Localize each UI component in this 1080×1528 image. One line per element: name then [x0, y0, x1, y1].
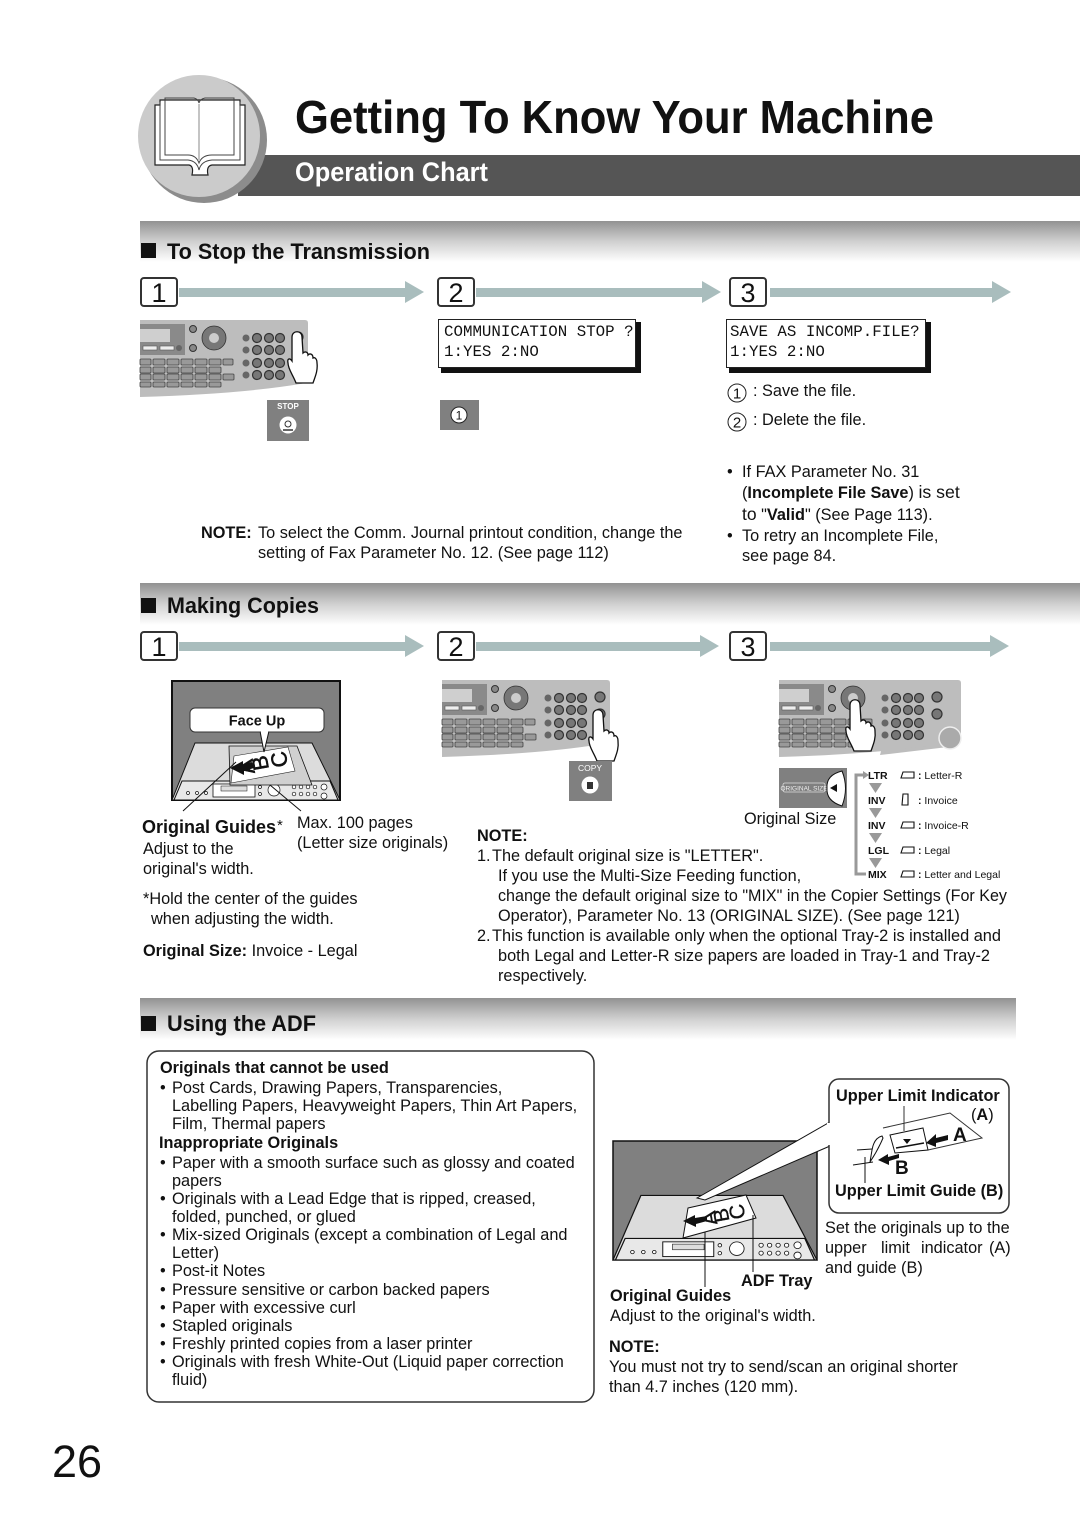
original guides label: Adjust to the original's width. — [610, 1307, 816, 1325]
original size key: ORIGINAL SIZE — [780, 786, 828, 792]
display: save as incomplete file: 1:YES 2:NO — [730, 343, 825, 361]
original guides text: original's width. — [143, 860, 254, 878]
face up label — [190, 708, 324, 752]
copy note: The default original size is "LETTER". — [492, 847, 763, 865]
control panel with hand on stop — [140, 320, 317, 397]
control panel with hand on original size — [779, 680, 961, 757]
panel: originals that cannot be used: Originals with a Lead Edge that is ripped, creased, — [172, 1190, 536, 1208]
paper size cycle list: : Letter-R — [918, 770, 963, 782]
fax parameter bullets: (Incomplete File Save) is set — [742, 482, 960, 502]
panel: originals that cannot be used — [147, 1051, 594, 1402]
panel: originals that cannot be used: Letter) — [172, 1244, 219, 1262]
original guides text: Original Guides — [142, 817, 276, 837]
max pages text — [297, 814, 448, 852]
display: communication stop — [438, 320, 641, 373]
ADF note: than 4.7 inches (120 mm). — [609, 1378, 798, 1396]
header band — [238, 155, 1080, 196]
copy note: respectively. — [498, 967, 587, 985]
panel: originals that cannot be used: Post Cards, Drawing Papers, Transparencies, — [172, 1079, 502, 1097]
paper size cycle list: LGL — [868, 845, 890, 857]
paper size cycle list: : Legal — [918, 845, 950, 857]
panel: originals that cannot be used: papers — [172, 1172, 222, 1190]
option list: 1 — [733, 386, 741, 402]
square bullet — [141, 243, 156, 258]
max pages text: (Letter size originals) — [297, 834, 448, 852]
panel: originals that cannot be used: folded, punched, or glued — [172, 1208, 356, 1226]
panel: originals that cannot be used: • — [160, 1262, 166, 1280]
panel: originals that cannot be used: Paper with a smooth surface such as glossy and coated — [172, 1154, 575, 1172]
section band — [140, 583, 1080, 625]
panel: originals that cannot be used: fluid) — [172, 1371, 207, 1389]
heading: Making Copies — [167, 593, 319, 618]
fax parameter bullets: If FAX Parameter No. 31 — [742, 463, 919, 481]
ADF illustration — [613, 1122, 830, 1260]
original guides text: *Hold the center of the guides — [143, 890, 358, 908]
panel: originals that cannot be used: Freshly printed copies from a laser printer — [172, 1335, 473, 1353]
copy key icon — [569, 761, 612, 801]
display: communication stop: COMMUNICATION STOP ? — [444, 323, 634, 341]
panel: originals that cannot be used: Originals with fresh White-Out (Liquid paper correction — [172, 1353, 564, 1371]
fax parameter bullets: to "Valid" (See Page 113). — [742, 504, 933, 524]
callout wedge — [697, 1122, 830, 1200]
title: Getting To Know Your Machine — [295, 91, 934, 143]
page number: 26 — [52, 1436, 102, 1487]
panel: originals that cannot be used: • — [160, 1079, 166, 1097]
paper size cycle list: INV — [868, 795, 886, 807]
key 1 icon — [440, 400, 479, 430]
display: save as incomplete file: SAVE AS INCOMP.FILE? — [730, 323, 920, 341]
option list: 2 — [733, 414, 741, 432]
step 2 box — [438, 632, 474, 662]
original size key — [779, 768, 847, 808]
fax parameter bullets: To retry an Incomplete File, — [742, 527, 938, 545]
step 1 box: 1 — [151, 278, 167, 308]
leader lines — [183, 762, 301, 811]
panel: originals that cannot be used: • — [160, 1190, 166, 1208]
callout: upper limit detail: (A) — [971, 1106, 994, 1124]
copy note: Operator), Parameter No. 13 (ORIGINAL SIZE). (See page 121) — [498, 907, 960, 925]
step 3 box: 3 — [740, 278, 756, 308]
header book icon — [138, 75, 267, 203]
panel: originals that cannot be used: • — [160, 1281, 166, 1299]
square bullet — [141, 1016, 156, 1031]
copy note: 2. — [477, 927, 491, 945]
arrow 2 — [476, 281, 721, 303]
step 2 box: 2 — [448, 278, 464, 308]
control panel with hand on copy — [442, 680, 618, 761]
callout: upper limit detail: B — [895, 1158, 909, 1179]
panel: originals that cannot be used: Film, Thermal papers — [172, 1115, 326, 1133]
ADF note: NOTE: — [609, 1338, 660, 1356]
panel: originals that cannot be used: Pressure sensitive or carbon backed papers — [172, 1281, 490, 1299]
section: To Stop the Transmission — [140, 221, 1080, 264]
note: comm journal — [201, 524, 682, 562]
original guides label: Original Guides — [610, 1287, 731, 1305]
face up document illustration: ABC — [233, 749, 293, 776]
paper size cycle list: LTR — [868, 770, 888, 782]
callout: upper limit detail: Upper Limit Indicator — [836, 1087, 1000, 1105]
fax parameter bullets: • — [727, 527, 733, 545]
steps row 2 — [141, 632, 1009, 662]
panel: originals that cannot be used: • — [160, 1299, 166, 1317]
set originals text: limit — [881, 1239, 910, 1257]
note: comm journal: setting of Fax Parameter No. 12. (See page 112) — [258, 544, 609, 562]
fax parameter bullets: • — [727, 463, 733, 481]
arrow 2 — [476, 635, 719, 657]
option list: : Save the file. — [753, 382, 856, 400]
step 3 box — [730, 632, 766, 662]
panel: originals that cannot be used: Labelling Papers, Heavyweight Papers, Thin Art Papers, — [172, 1097, 577, 1115]
heading: To Stop the Transmission — [167, 239, 430, 264]
heading: Using the ADF — [167, 1011, 316, 1036]
arrow 3 — [770, 635, 1009, 657]
step 2 box — [438, 278, 474, 308]
note: comm journal: To select the Comm. Journal printout condition, change the — [258, 524, 682, 542]
callout: upper limit detail: A — [953, 1125, 967, 1146]
step 2 box: 2 — [448, 632, 464, 662]
copy note: both Legal and Letter-R size papers are loaded in Tray-1 and Tray-2 — [498, 947, 990, 965]
panel: originals that cannot be used: • — [160, 1353, 166, 1371]
option list: : Delete the file. — [753, 411, 866, 429]
arrow 3 — [770, 281, 1011, 303]
panel: originals that cannot be used: Post-it Notes — [172, 1262, 265, 1280]
paper size cycle list: : Invoice-R — [918, 820, 969, 832]
option list — [728, 382, 866, 432]
original guides text: when adjusting the width. — [150, 910, 334, 928]
paper size cycle list: : Letter and Legal — [918, 869, 1000, 881]
set originals text: upper — [825, 1239, 867, 1257]
display: communication stop: 1:YES 2:NO — [444, 343, 539, 361]
paper size cycle list — [856, 770, 1000, 881]
ADF note — [609, 1338, 958, 1396]
set originals text: (A) — [989, 1239, 1011, 1257]
steps row 1 — [141, 278, 1011, 308]
paper size cycle list: INV — [868, 820, 886, 832]
original guides label — [610, 1287, 816, 1325]
fax parameter bullets — [727, 463, 960, 565]
set originals text: and guide (B) — [825, 1259, 923, 1277]
step 1 box — [141, 632, 177, 662]
section band — [140, 221, 1080, 262]
arrow 1 — [179, 281, 424, 303]
set originals text: indicator — [921, 1239, 983, 1257]
ADF tray label: ADF Tray — [741, 1272, 812, 1290]
step 3 box — [730, 278, 766, 308]
stop key icon: STOP — [277, 402, 299, 411]
panel: originals that cannot be used: Mix-sized Originals (except a combination of Legal and — [172, 1226, 567, 1244]
copy key icon: COPY — [578, 763, 602, 773]
panel: originals that cannot be used: Originals that cannot be used — [160, 1059, 389, 1077]
copy note: If you use the Multi-Size Feeding function, — [498, 867, 801, 885]
paper size cycle list: : Invoice — [918, 795, 958, 807]
fax parameter bullets: see page 84. — [742, 547, 836, 565]
panel: originals that cannot be used: Paper with excessive curl — [172, 1299, 356, 1317]
display: save as incomplete file — [726, 320, 931, 373]
copy note: change the default original size to "MIX" in the Copier Settings (For Key — [498, 887, 1008, 905]
paper size cycle list: MIX — [868, 869, 887, 881]
callout: upper limit detail: Upper Limit Guide (B) — [835, 1182, 1003, 1200]
subtitle: Operation Chart — [295, 157, 488, 187]
leader lines for tray and guides — [705, 1215, 753, 1287]
step 1 box: 1 — [151, 632, 167, 662]
face up label: Face Up — [229, 714, 285, 730]
original guides text: Original Size: Invoice - Legal — [143, 942, 357, 960]
section: Making Copies — [140, 583, 1080, 625]
original size label: Original Size — [744, 810, 836, 828]
copy note — [477, 827, 1008, 985]
copy note: 1. — [477, 847, 491, 865]
panel: originals that cannot be used: • — [160, 1317, 166, 1335]
face up document illustration — [172, 681, 340, 800]
set originals text — [825, 1219, 1011, 1277]
max pages text: Max. 100 pages — [297, 814, 413, 832]
arrow 1 — [179, 635, 424, 657]
section: Using the ADF — [140, 998, 1016, 1040]
original guides text — [142, 817, 358, 960]
step 3 box: 3 — [740, 632, 756, 662]
section band — [140, 998, 1016, 1040]
original guides text: * — [277, 817, 283, 834]
panel: originals that cannot be used: Stapled originals — [172, 1317, 292, 1335]
panel: originals that cannot be used: Inappropriate Originals — [159, 1134, 338, 1152]
copy note: This function is available only when the optional Tray-2 is installed and — [492, 927, 1001, 945]
copy note: NOTE: — [477, 827, 528, 845]
note: comm journal: NOTE: — [201, 524, 252, 542]
panel: originals that cannot be used: • — [160, 1335, 166, 1353]
original guides text: Adjust to the — [143, 840, 234, 858]
set originals text: Set the originals up to the — [825, 1219, 1010, 1237]
stop key icon — [267, 400, 309, 441]
ADF note: You must not try to send/scan an original shorter — [609, 1358, 958, 1376]
square bullet — [141, 598, 156, 613]
key 1 icon: 1 — [456, 408, 463, 422]
step 1 box — [141, 278, 177, 308]
ADF illustration: ABC — [697, 1202, 750, 1227]
panel: originals that cannot be used: • — [160, 1226, 166, 1244]
callout: upper limit detail — [827, 1079, 1009, 1213]
panel: originals that cannot be used: • — [160, 1154, 166, 1172]
